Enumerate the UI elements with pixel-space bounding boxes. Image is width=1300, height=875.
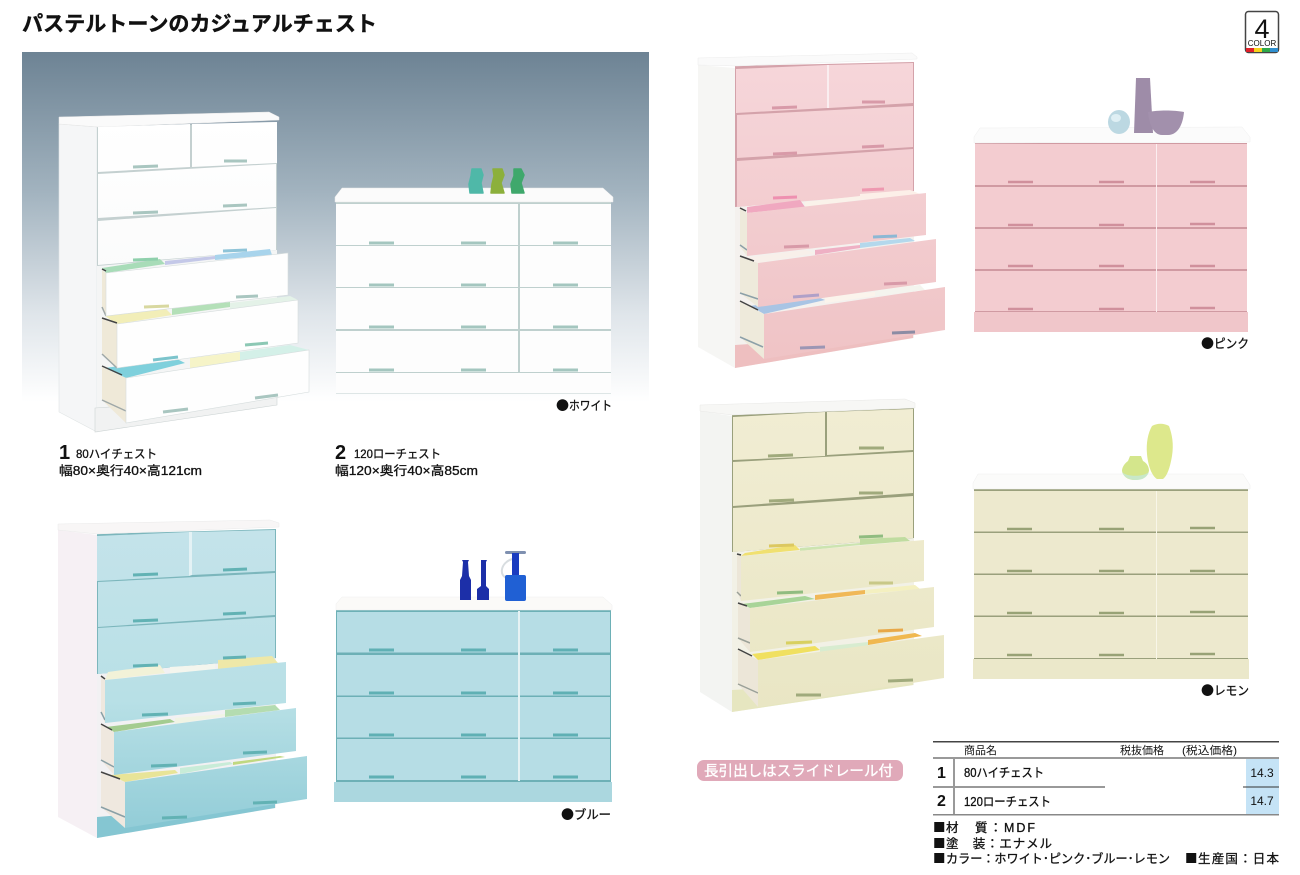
badge: 4 colors	[1246, 12, 1278, 52]
side panel	[698, 65, 735, 368]
drawers	[337, 612, 610, 780]
drawer divider	[189, 532, 192, 576]
colour label: lemon: ●	[1201, 680, 1214, 699]
table header: 税抜価格	[1120, 743, 1164, 757]
colour label: lemon	[1201, 680, 1249, 699]
specifications: ■	[1185, 848, 1198, 867]
label: item 1: 1	[59, 442, 70, 464]
plinth	[334, 782, 612, 802]
top board	[336, 597, 612, 610]
open drawer interiors	[101, 677, 125, 828]
specifications: 生産国：日本	[1198, 852, 1279, 866]
handles	[1007, 528, 1215, 655]
colour label: blue: ●	[561, 804, 574, 823]
drawers	[974, 491, 1248, 658]
top board	[58, 520, 279, 534]
open drawer fronts	[747, 193, 945, 359]
top board	[973, 474, 1250, 489]
colour label: lemon: レモン	[1214, 684, 1249, 698]
drawer divider	[827, 65, 829, 108]
drawers	[336, 204, 611, 393]
vases: cobalt bottles and jug	[460, 551, 526, 601]
vases: three green bottles	[469, 169, 524, 193]
pink low chest	[974, 127, 1250, 332]
label: item 1: 幅80×奥行40×高121cm	[59, 463, 202, 478]
specifications: ■	[933, 817, 946, 836]
table rules	[933, 741, 1279, 816]
row 1: 80ハイチェスト	[964, 766, 1044, 780]
label: item 2: 2	[335, 442, 346, 464]
row 1: 1	[937, 765, 946, 782]
label: item 1: 80ハイチェスト	[76, 447, 157, 461]
drawer shadows and runners	[102, 269, 126, 411]
callout: slide rail: 長引出しはスライドレール付	[704, 763, 893, 780]
body front	[732, 408, 914, 554]
body	[974, 489, 1248, 659]
open drawer fronts	[106, 253, 309, 423]
vertical gap	[1156, 144, 1157, 312]
handles	[133, 569, 277, 818]
row 2: 120ローチェスト	[964, 795, 1051, 809]
open drawer fronts	[105, 662, 307, 828]
drawers	[975, 144, 1247, 311]
table header	[964, 743, 1237, 757]
title: パステルトーンのカジュアルチェスト	[22, 13, 377, 36]
plinth	[97, 803, 275, 838]
specifications: カラー：ホワイト･ピンク･ブルー･レモン	[946, 851, 1170, 866]
colour label: pink: ピンク	[1214, 337, 1249, 351]
folded clothes	[745, 190, 925, 314]
folded clothes	[741, 537, 922, 660]
top board	[335, 188, 613, 202]
side panel	[58, 530, 97, 838]
label: item 2	[335, 442, 478, 478]
price cells	[1246, 758, 1279, 815]
row 2	[937, 793, 1274, 810]
colour label: pink	[1201, 333, 1249, 352]
drawer shadows and runners	[737, 554, 758, 693]
handles	[772, 102, 915, 348]
badge: 4 colors: COLOR	[1248, 39, 1276, 48]
top board	[974, 127, 1250, 143]
top board	[700, 399, 915, 415]
open drawer interiors	[737, 555, 758, 707]
drawers closed	[736, 63, 913, 207]
drawer shadows and runners	[101, 676, 125, 817]
badge: 4 colors: 4	[1254, 14, 1270, 44]
row 2: 14.7	[1250, 794, 1274, 808]
specifications: 塗 装：エナメル	[946, 837, 1052, 851]
label: item 2: 幅120×奥行40×高85cm	[335, 463, 478, 478]
handles	[1008, 182, 1215, 309]
colour label: white: ホワイト	[569, 399, 612, 413]
side panel	[700, 411, 732, 712]
colour label: white: ●	[556, 395, 569, 414]
specifications	[933, 817, 1279, 867]
body front	[97, 529, 276, 676]
handles	[133, 161, 278, 412]
white high chest	[59, 112, 309, 432]
vases: lime vases	[1122, 424, 1173, 480]
plinth	[732, 680, 913, 712]
drawers closed	[733, 409, 913, 552]
table header: 商品名	[964, 743, 997, 757]
top board	[698, 53, 917, 66]
handles	[369, 243, 578, 370]
specifications: 材 質：MDF	[946, 820, 1035, 835]
vases: lilac vase, bowl and sphere	[1108, 78, 1184, 135]
plinth	[95, 396, 277, 432]
body front	[735, 62, 914, 209]
callout: slide rail	[697, 760, 903, 781]
folded clothes	[105, 656, 285, 782]
folded clothes	[102, 249, 309, 378]
label: item 1	[59, 442, 202, 478]
colour label: white	[556, 395, 612, 414]
row 1	[937, 765, 1274, 782]
specifications: ■	[933, 848, 946, 867]
colour label: blue	[561, 804, 611, 823]
open drawer interiors	[102, 270, 126, 423]
lemon low chest	[973, 474, 1250, 679]
open drawer fronts	[741, 540, 944, 707]
row 1: 14.3	[1250, 766, 1274, 780]
vertical gap	[518, 611, 520, 781]
colour label: blue: ブルー	[574, 807, 611, 822]
row 2: 2	[937, 793, 946, 810]
top board	[59, 112, 279, 127]
price table	[933, 741, 1279, 816]
handles	[369, 650, 578, 777]
body	[975, 143, 1247, 313]
plinth	[735, 333, 913, 368]
plinth	[973, 659, 1249, 679]
table header: (税込価格)	[1182, 743, 1237, 757]
white low chest	[335, 188, 613, 394]
panel: gradient backdrop	[22, 52, 649, 402]
label: item 2: 120ローチェスト	[354, 447, 441, 461]
side panel	[59, 124, 97, 432]
vertical gap	[1156, 491, 1157, 659]
drawers closed	[97, 530, 275, 674]
colour label: pink: ●	[1201, 333, 1214, 352]
drawer shadows and runners	[740, 208, 763, 347]
body	[336, 202, 611, 394]
open drawer interiors	[740, 209, 764, 359]
pink high chest	[698, 53, 945, 368]
blue low chest	[334, 597, 612, 802]
handles	[768, 448, 913, 695]
blue high chest	[58, 520, 307, 838]
body	[336, 610, 611, 782]
drawers closed	[98, 122, 277, 265]
specifications: ■	[933, 833, 946, 852]
lemon high chest	[700, 399, 944, 712]
body front	[97, 122, 277, 432]
plinth	[974, 312, 1248, 332]
